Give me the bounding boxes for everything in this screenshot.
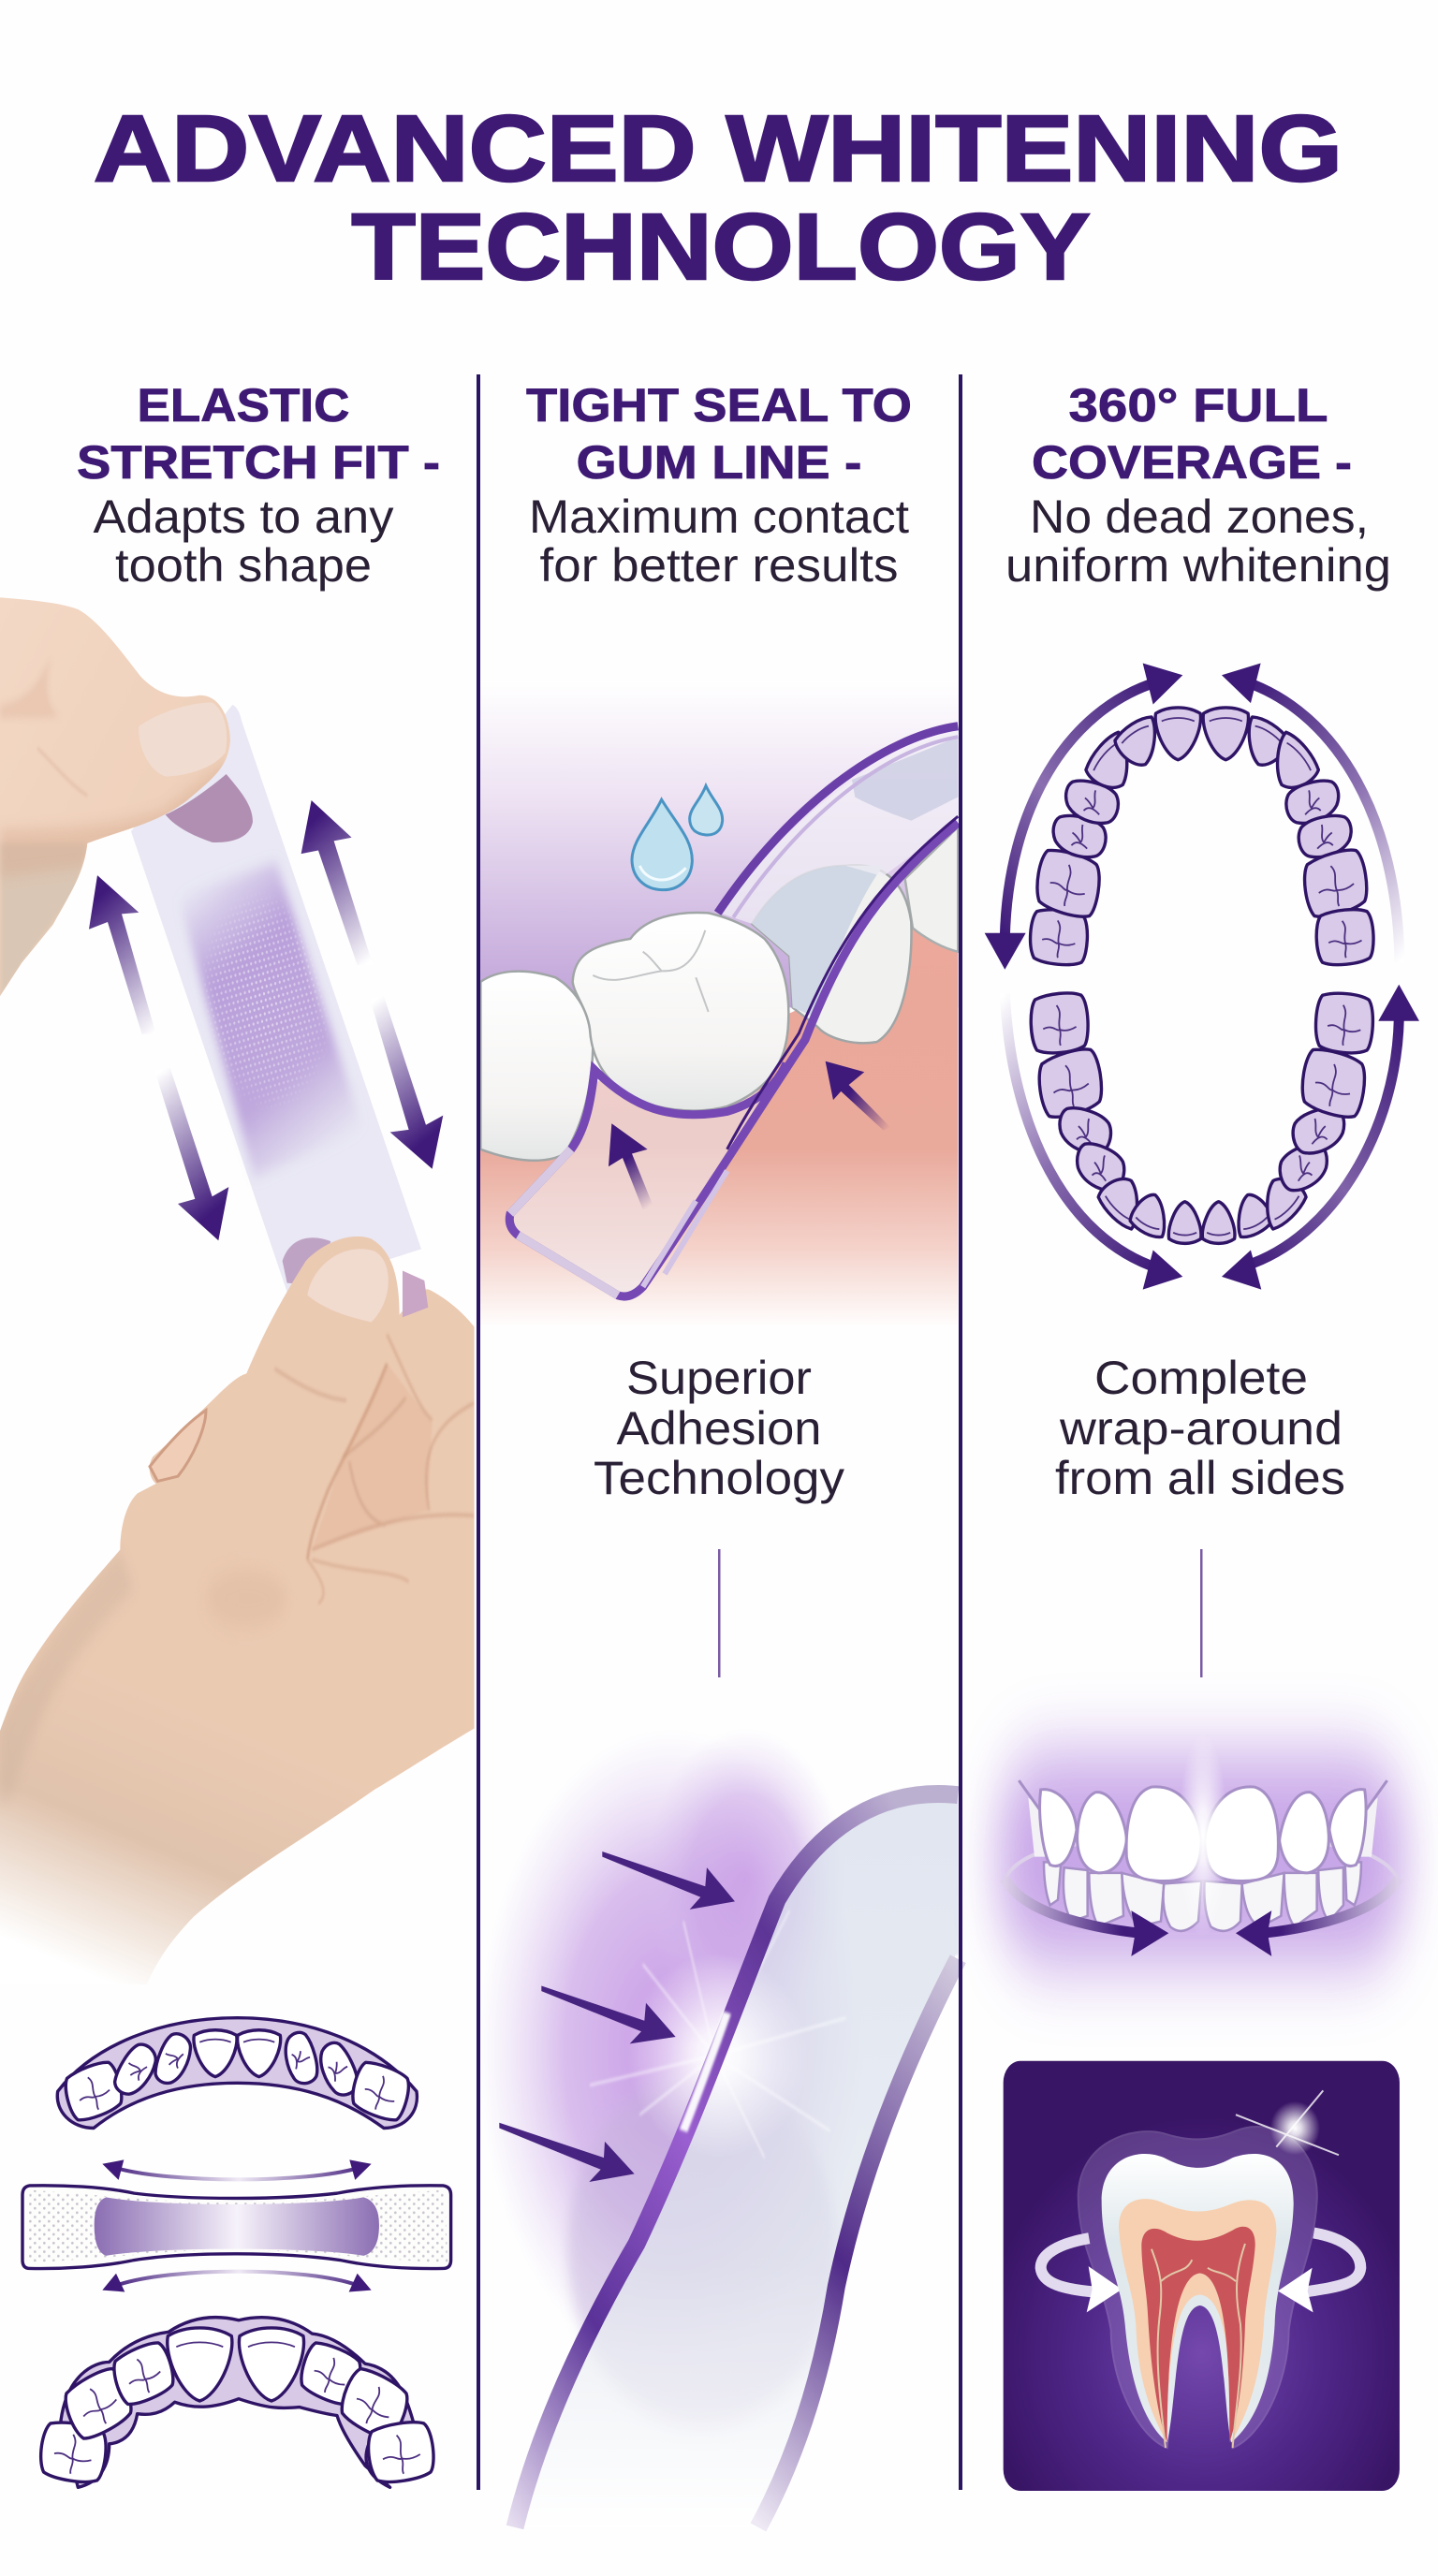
central molar [480, 913, 788, 1161]
column heading: elastic stretch fit: Adapts to any [94, 490, 393, 543]
enamel [1102, 2154, 1294, 2442]
icon: lower arch teeth [1030, 991, 1374, 1243]
arrow: press 2 [541, 1985, 676, 2043]
tooth halo [1078, 2127, 1317, 2448]
icon: upper tray with teeth [57, 2018, 417, 2129]
icon: lower tray conforming to teeth [37, 2318, 436, 2487]
arrow: press left [609, 1123, 653, 1209]
dentin [1119, 2199, 1276, 2437]
column heading: tight seal to gum line: TIGHT SEAL TO [526, 379, 912, 432]
glow [999, 1755, 1404, 1964]
title [94, 96, 1343, 300]
arrow: stretch above strip [102, 2159, 372, 2180]
column heading: 360 full coverage: No dead zones, [1030, 490, 1369, 543]
ring arrows [1041, 2232, 1360, 2312]
text: complete wrap-around: Complete [1094, 1352, 1308, 1404]
panel: glowing smile with wrap arrows [999, 1734, 1404, 1964]
panel: tray and strip diagrams [22, 2018, 451, 2487]
upper teeth [1019, 1780, 1387, 1881]
text: complete wrap-around: from all sides [1055, 1452, 1345, 1504]
arrows: wrap around teeth [1005, 1879, 1398, 1956]
title: ADVANCED WHITENING [94, 96, 1343, 201]
lower teeth [1044, 1862, 1361, 1931]
arrow: press 3 [499, 2123, 635, 2182]
arrow: stretch right [301, 800, 443, 1169]
arrow: lower right arc [1222, 985, 1419, 1290]
column heading: tight seal to gum line: GUM LINE - [577, 436, 861, 489]
arrow: press 1 [602, 1852, 735, 1910]
text: superior adhesion: Technology [594, 1452, 844, 1504]
ring behind teeth [1005, 1840, 1398, 1879]
small vertical connector lines [718, 1549, 1202, 1677]
adhesive strip [509, 726, 958, 1296]
panel: glowing strip cross-section [477, 1728, 958, 2527]
arrow: press right [826, 1061, 891, 1130]
arrow: stretch below strip [102, 2272, 372, 2291]
panel: dental arch 360 coverage [985, 663, 1419, 1290]
pulp [1141, 2227, 1255, 2442]
text: complete wrap-around [1055, 1352, 1345, 1504]
column heading: 360 full coverage [1005, 379, 1391, 592]
title: TECHNOLOGY [352, 195, 1090, 300]
strip edge along gum line [509, 816, 958, 1296]
glow [477, 1728, 958, 2527]
column heading: tight seal to gum line: Maximum contact [529, 490, 909, 543]
column heading: elastic stretch fit: ELASTIC [137, 379, 350, 432]
column heading: elastic stretch fit [77, 379, 440, 592]
text: complete wrap-around: wrap-around [1059, 1402, 1343, 1455]
sparkle [1236, 2090, 1339, 2155]
text: superior adhesion: Adhesion [616, 1402, 822, 1455]
column heading: tight seal to gum line [526, 379, 912, 592]
text: superior adhesion: Superior [626, 1352, 812, 1404]
arrow: upper right arc [1222, 663, 1400, 963]
gum [480, 926, 958, 1329]
arrow: upper left arc [985, 663, 1182, 970]
panel: elastic stretch fit illustration [0, 562, 477, 1984]
column heading: elastic stretch fit: tooth shape [115, 539, 372, 592]
column heading: tight seal to gum line: for better results [539, 539, 899, 592]
icon: hand holding strip bottom [0, 1217, 477, 1984]
icon: flat stretch strip [22, 2186, 451, 2269]
back teeth under strip [752, 827, 958, 1043]
icon: water drops [632, 786, 723, 890]
column heading: elastic stretch fit: STRETCH FIT - [77, 436, 440, 489]
column heading: 360 full coverage: COVERAGE - [1032, 436, 1352, 489]
arrow: stretch left [89, 875, 228, 1240]
arrow: lower left arc [1005, 993, 1182, 1290]
panel: purple tooth anatomy card [1004, 2061, 1400, 2491]
stretch strip [131, 705, 421, 1292]
column heading: 360 full coverage: 360° FULL [1069, 379, 1328, 432]
icon: upper arch teeth [1029, 708, 1374, 967]
dividers [477, 374, 962, 2490]
strip edges [515, 1794, 958, 2527]
icon: hand pinching strip top [0, 562, 421, 1292]
panel: gum line seal illustration [480, 681, 958, 1329]
text: superior adhesion [594, 1352, 844, 1504]
column heading: 360 full coverage: uniform whitening [1005, 539, 1391, 592]
